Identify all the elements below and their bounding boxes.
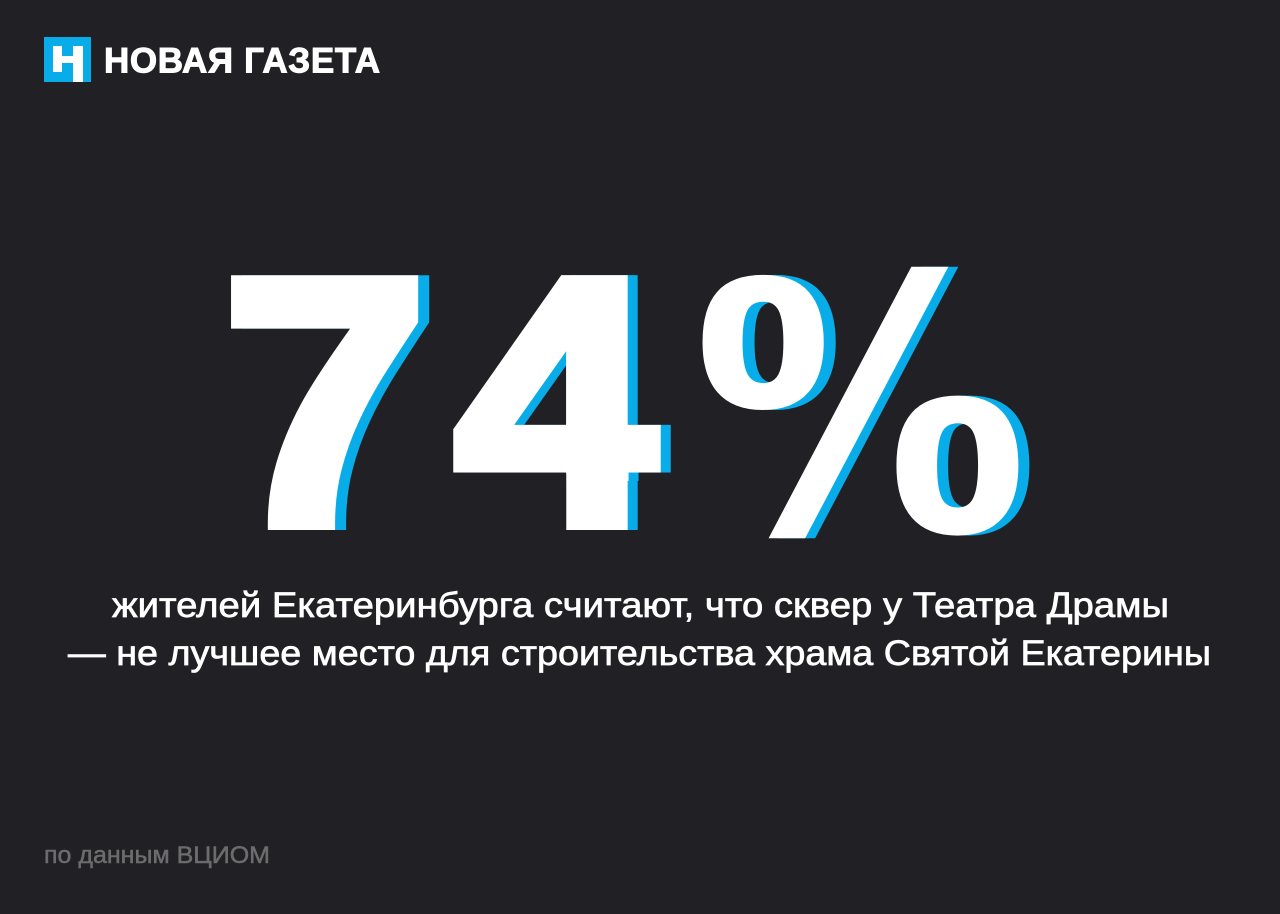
logo: Novaya Gazeta bbox=[44, 37, 380, 82]
digit 7: 7 bbox=[223, 207, 427, 598]
source note: по данным ВЦИОМ bbox=[44, 842, 270, 869]
digit 4: 4 bbox=[465, 207, 668, 598]
digit 4: 4 bbox=[465, 209, 668, 584]
logo wordmark: НОВАЯ ГАЗЕТА bbox=[104, 42, 380, 80]
description line 2: — не лучшее место для строительства храма Святой Екатерины bbox=[68, 634, 1211, 673]
percent sign: % bbox=[708, 215, 1008, 549]
description text bbox=[68, 586, 1211, 673]
icon: logo square bbox=[44, 37, 91, 82]
percent sign: % bbox=[734, 251, 1036, 597]
big number: 74% bbox=[231, 266, 1030, 538]
digit 4 bbox=[453, 275, 671, 530]
percent sign: % bbox=[696, 215, 996, 549]
digit 4: 4 bbox=[455, 207, 658, 598]
description line 1: жителей Екатеринбурга считают, что сквер у Театра Драмы bbox=[112, 586, 1169, 625]
digit 7: 7 bbox=[234, 207, 438, 598]
percent sign: % bbox=[720, 186, 997, 618]
percent sign: % bbox=[730, 186, 1007, 618]
digit 4: 4 bbox=[455, 209, 658, 584]
percent sign: % bbox=[724, 251, 1025, 597]
